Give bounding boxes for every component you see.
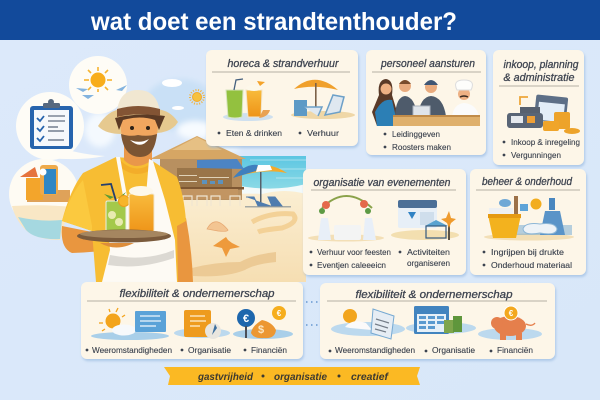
ribbon: kernwoorden: creatief bbox=[351, 371, 389, 383]
bullets: Eten & drinken bbox=[226, 129, 282, 138]
bullets: Onderhoud materiaal bbox=[491, 261, 572, 270]
bullets: Financiën bbox=[251, 346, 287, 355]
panel: flexibiliteit rechts bbox=[320, 283, 555, 359]
icon: weather and document bbox=[331, 309, 405, 339]
tray with drinks bbox=[77, 184, 171, 248]
icon: staff behind counter bbox=[372, 79, 480, 126]
bullets: Activiteiten bbox=[407, 248, 450, 257]
icon: bucket and beach gear bbox=[484, 196, 574, 240]
heading: inkoop, planning bbox=[504, 59, 579, 71]
icon: floral arch with table bbox=[308, 196, 384, 242]
icon: euro sign and money bag bbox=[233, 306, 293, 339]
title: wat doet een strandtenthouder? bbox=[90, 8, 457, 36]
bullets bbox=[384, 130, 451, 152]
speech bubble: beach rental scene bbox=[9, 159, 79, 240]
icon: small sun bbox=[190, 90, 204, 104]
icon: euro sign and money bag: € bbox=[243, 313, 249, 325]
icon: weather and notice bbox=[91, 308, 169, 340]
bullets bbox=[503, 138, 580, 160]
heading: flexibiliteit & ondernemerschap bbox=[356, 289, 512, 301]
heading: personeel aansturen bbox=[380, 58, 475, 70]
icon: umbrella and deck chairs bbox=[291, 80, 355, 119]
bullets: Weeromstandigheden bbox=[335, 346, 415, 355]
bullets: Inkoop & inregeling bbox=[511, 138, 580, 147]
icon: drinks bbox=[223, 79, 273, 121]
icon: starfish bbox=[213, 237, 240, 257]
ribbon: kernwoorden: gastvrijheid bbox=[197, 371, 254, 383]
panel: horeca en strandverhuur bbox=[206, 50, 358, 146]
icon: shell bbox=[207, 222, 228, 231]
icon: table sheet and money bbox=[406, 306, 476, 334]
header banner bbox=[0, 0, 600, 40]
bullets: Financiën bbox=[497, 346, 533, 355]
icon: euro sign and money bag: $ bbox=[258, 324, 264, 336]
heading: beheer & onderhoud bbox=[482, 176, 573, 188]
apron bbox=[102, 157, 177, 282]
character: beach tent owner bbox=[62, 90, 193, 282]
icon: cash register, calendar and coins bbox=[507, 94, 580, 134]
icon: euro sign and money bag: € bbox=[277, 309, 282, 318]
bullets: Organisatie bbox=[432, 346, 476, 355]
speech bubble: clipboard bbox=[16, 92, 105, 160]
connector dots bbox=[301, 302, 320, 325]
bullets bbox=[310, 248, 450, 270]
bullets: Verhuur voor feesten bbox=[317, 248, 391, 257]
heading: & administratie bbox=[504, 72, 574, 84]
bullets: Verhuur bbox=[307, 129, 339, 138]
neck bbox=[124, 145, 152, 166]
heading bbox=[504, 59, 579, 84]
bullets bbox=[483, 248, 572, 270]
bullets bbox=[86, 346, 287, 355]
clouds bbox=[87, 79, 184, 110]
bullets bbox=[329, 346, 533, 355]
panel: beheer en onderhoud bbox=[470, 169, 586, 275]
heading: flexibiliteit & ondernemerschap bbox=[120, 288, 274, 300]
panel: inkoop, planning en administratie bbox=[493, 50, 584, 165]
shirt bbox=[62, 157, 186, 282]
panel: flexibiliteit links bbox=[81, 282, 303, 359]
icon: clipboard checklist bbox=[30, 99, 73, 149]
bullets: Weeromstandigheden bbox=[92, 346, 172, 355]
bullets bbox=[218, 129, 339, 138]
bullets: Ingrijpen bij drukte bbox=[491, 248, 565, 257]
bullets: Eventjen caleeeicn bbox=[317, 261, 386, 270]
icon: document and feather bbox=[174, 310, 230, 339]
bullets: Organisatie bbox=[188, 346, 232, 355]
heading: organisatie van evenementen bbox=[314, 177, 450, 189]
bullets: Leidinggeven bbox=[392, 130, 440, 139]
arms bbox=[62, 226, 135, 253]
icon: piggy bank: € bbox=[509, 309, 514, 318]
beach umbrella and loungers bbox=[233, 165, 291, 208]
face bbox=[115, 114, 165, 157]
icon: piggy bank bbox=[478, 306, 542, 340]
bullets: organiseren bbox=[407, 259, 450, 268]
ribbon: kernwoorden bbox=[164, 367, 420, 385]
bullets: Vergunningen bbox=[511, 151, 561, 160]
panel: personeel aansturen bbox=[366, 50, 486, 155]
bullets: Roosters maken bbox=[392, 143, 451, 152]
speech bubble: sun bbox=[69, 56, 127, 114]
ribbon: kernwoorden: organisatie bbox=[274, 371, 327, 383]
heading: horeca & strandverhuur bbox=[228, 58, 340, 70]
panel: organisatie van evenementen bbox=[303, 169, 466, 275]
beach bar bbox=[150, 136, 246, 206]
icon: calendar with gazebo bbox=[391, 200, 459, 240]
straw hat bbox=[98, 90, 178, 157]
beach scene bbox=[85, 79, 306, 282]
